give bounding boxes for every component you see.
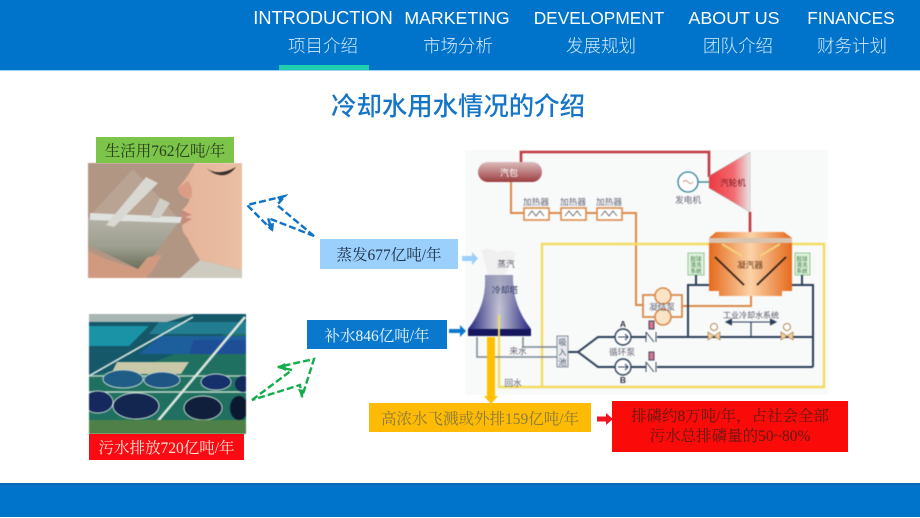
nav label: team: 团队介绍 <box>703 36 773 56</box>
process diagram: cooling tower and power plant loop <box>448 150 826 403</box>
water intake pool: 池 <box>558 357 566 367</box>
condenser: 凝汽器 <box>737 259 763 270</box>
steam pipes <box>521 152 750 232</box>
steam drum <box>478 162 542 182</box>
nav label: project introduction: 项目介绍 <box>288 36 358 56</box>
water intake pool: 来水 <box>509 345 527 356</box>
face <box>178 163 242 270</box>
icon: dashed blue curved arrow <box>246 194 315 238</box>
nav item: about us: ABOUT US <box>688 8 780 28</box>
heaters: 加热器 <box>596 196 622 207</box>
active tab indicator <box>279 65 369 70</box>
industrial cooling water system <box>708 310 793 340</box>
label: wastewater discharge: 污水排放720亿吨/年 <box>98 440 235 457</box>
steam plume: 蒸汽 <box>497 258 515 269</box>
label: make-up water: 补水846亿吨/年 <box>324 328 430 344</box>
title: 冷却水用水情况的介绍 <box>331 93 585 121</box>
water intake pool <box>477 336 568 388</box>
water intake pool: 入 <box>558 348 566 357</box>
condensate pump <box>649 288 675 325</box>
label: evaporation <box>320 239 458 269</box>
label: make-up water <box>307 320 447 349</box>
generator: 发电机 <box>675 194 701 205</box>
label: evaporation: 蒸发677亿吨/年 <box>336 247 442 264</box>
generator <box>675 172 709 205</box>
nav label: development plan: 发展规划 <box>566 36 636 56</box>
callout: phosphorus discharge <box>612 401 848 452</box>
ball cleaning systems <box>688 253 810 275</box>
circulating pumps: A <box>620 319 626 329</box>
label: wastewater discharge <box>89 434 244 460</box>
turbine: 汽轮机 <box>720 178 746 188</box>
nav label: financial plan: 财务计划 <box>817 36 887 56</box>
heaters: 加热器 <box>560 196 586 207</box>
glass <box>88 169 180 268</box>
ball cleaning systems: 清洗 <box>796 261 808 269</box>
arrow: make-up water to tower <box>449 325 466 337</box>
cooling tower: 冷却塔 <box>492 284 518 295</box>
circulating pumps <box>609 319 635 385</box>
callout: phosphorus discharge: 排磷约8万吨/年，占社会全部 <box>631 408 829 424</box>
footer bar <box>0 483 920 517</box>
arrow: discharge down <box>484 337 498 404</box>
turbine <box>709 152 750 212</box>
steam plume <box>482 249 516 275</box>
header bar <box>0 0 920 71</box>
nav item: marketing: MARKETING <box>404 8 510 28</box>
ball cleaning systems: 系统 <box>690 267 702 275</box>
heaters: 加热器 <box>523 196 549 207</box>
water intake pool: 吸 <box>558 338 566 347</box>
condensate pump: 凝结泵 <box>649 301 675 312</box>
ball cleaning systems: 系统 <box>796 267 808 275</box>
cooling tower <box>468 275 531 336</box>
photo: wastewater treatment plant <box>88 313 247 435</box>
photo: woman drinking water <box>87 162 242 279</box>
hand <box>88 251 162 278</box>
cooling water loop <box>499 244 824 387</box>
condenser <box>709 232 792 296</box>
nav label: market analysis: 市场分析 <box>423 36 493 56</box>
circulating pumps: 循环泵 <box>609 346 635 357</box>
check valves <box>646 321 656 372</box>
ball cleaning systems: 清洗 <box>690 261 702 269</box>
label: domestic use: 生活用762亿吨/年 <box>105 143 225 160</box>
water intake pool: 回水 <box>504 377 522 388</box>
steam drum: 汽包 <box>500 167 518 178</box>
circulating pumps: B <box>620 375 626 385</box>
heaters <box>523 196 622 220</box>
arrow: to phosphorus note <box>597 413 612 425</box>
circulating water lines <box>568 275 813 367</box>
label: domestic use <box>96 137 234 163</box>
ball cleaning systems: 胶球 <box>796 255 808 263</box>
nav item: finances: FINANCES <box>807 8 895 28</box>
label: concentrated water discharge <box>369 403 591 432</box>
ball cleaning systems: 胶球 <box>690 255 702 263</box>
icon: dashed green curved arrow <box>251 357 316 402</box>
diagram background <box>465 150 828 395</box>
callout: phosphorus discharge: 污水总排磷量的50~80% <box>650 428 810 444</box>
arrow: evaporation to tower <box>462 252 478 265</box>
industrial cooling water system: 工业冷却水系统 <box>723 310 779 320</box>
nav item: development: DEVELOPMENT <box>534 8 664 28</box>
feedwater pipes <box>511 182 751 317</box>
shirt <box>180 260 242 278</box>
label: concentrated water discharge: 高浓水飞溅或外排159亿吨/年 <box>381 410 579 428</box>
nav item: introduction: INTRODUCTION <box>253 8 393 28</box>
